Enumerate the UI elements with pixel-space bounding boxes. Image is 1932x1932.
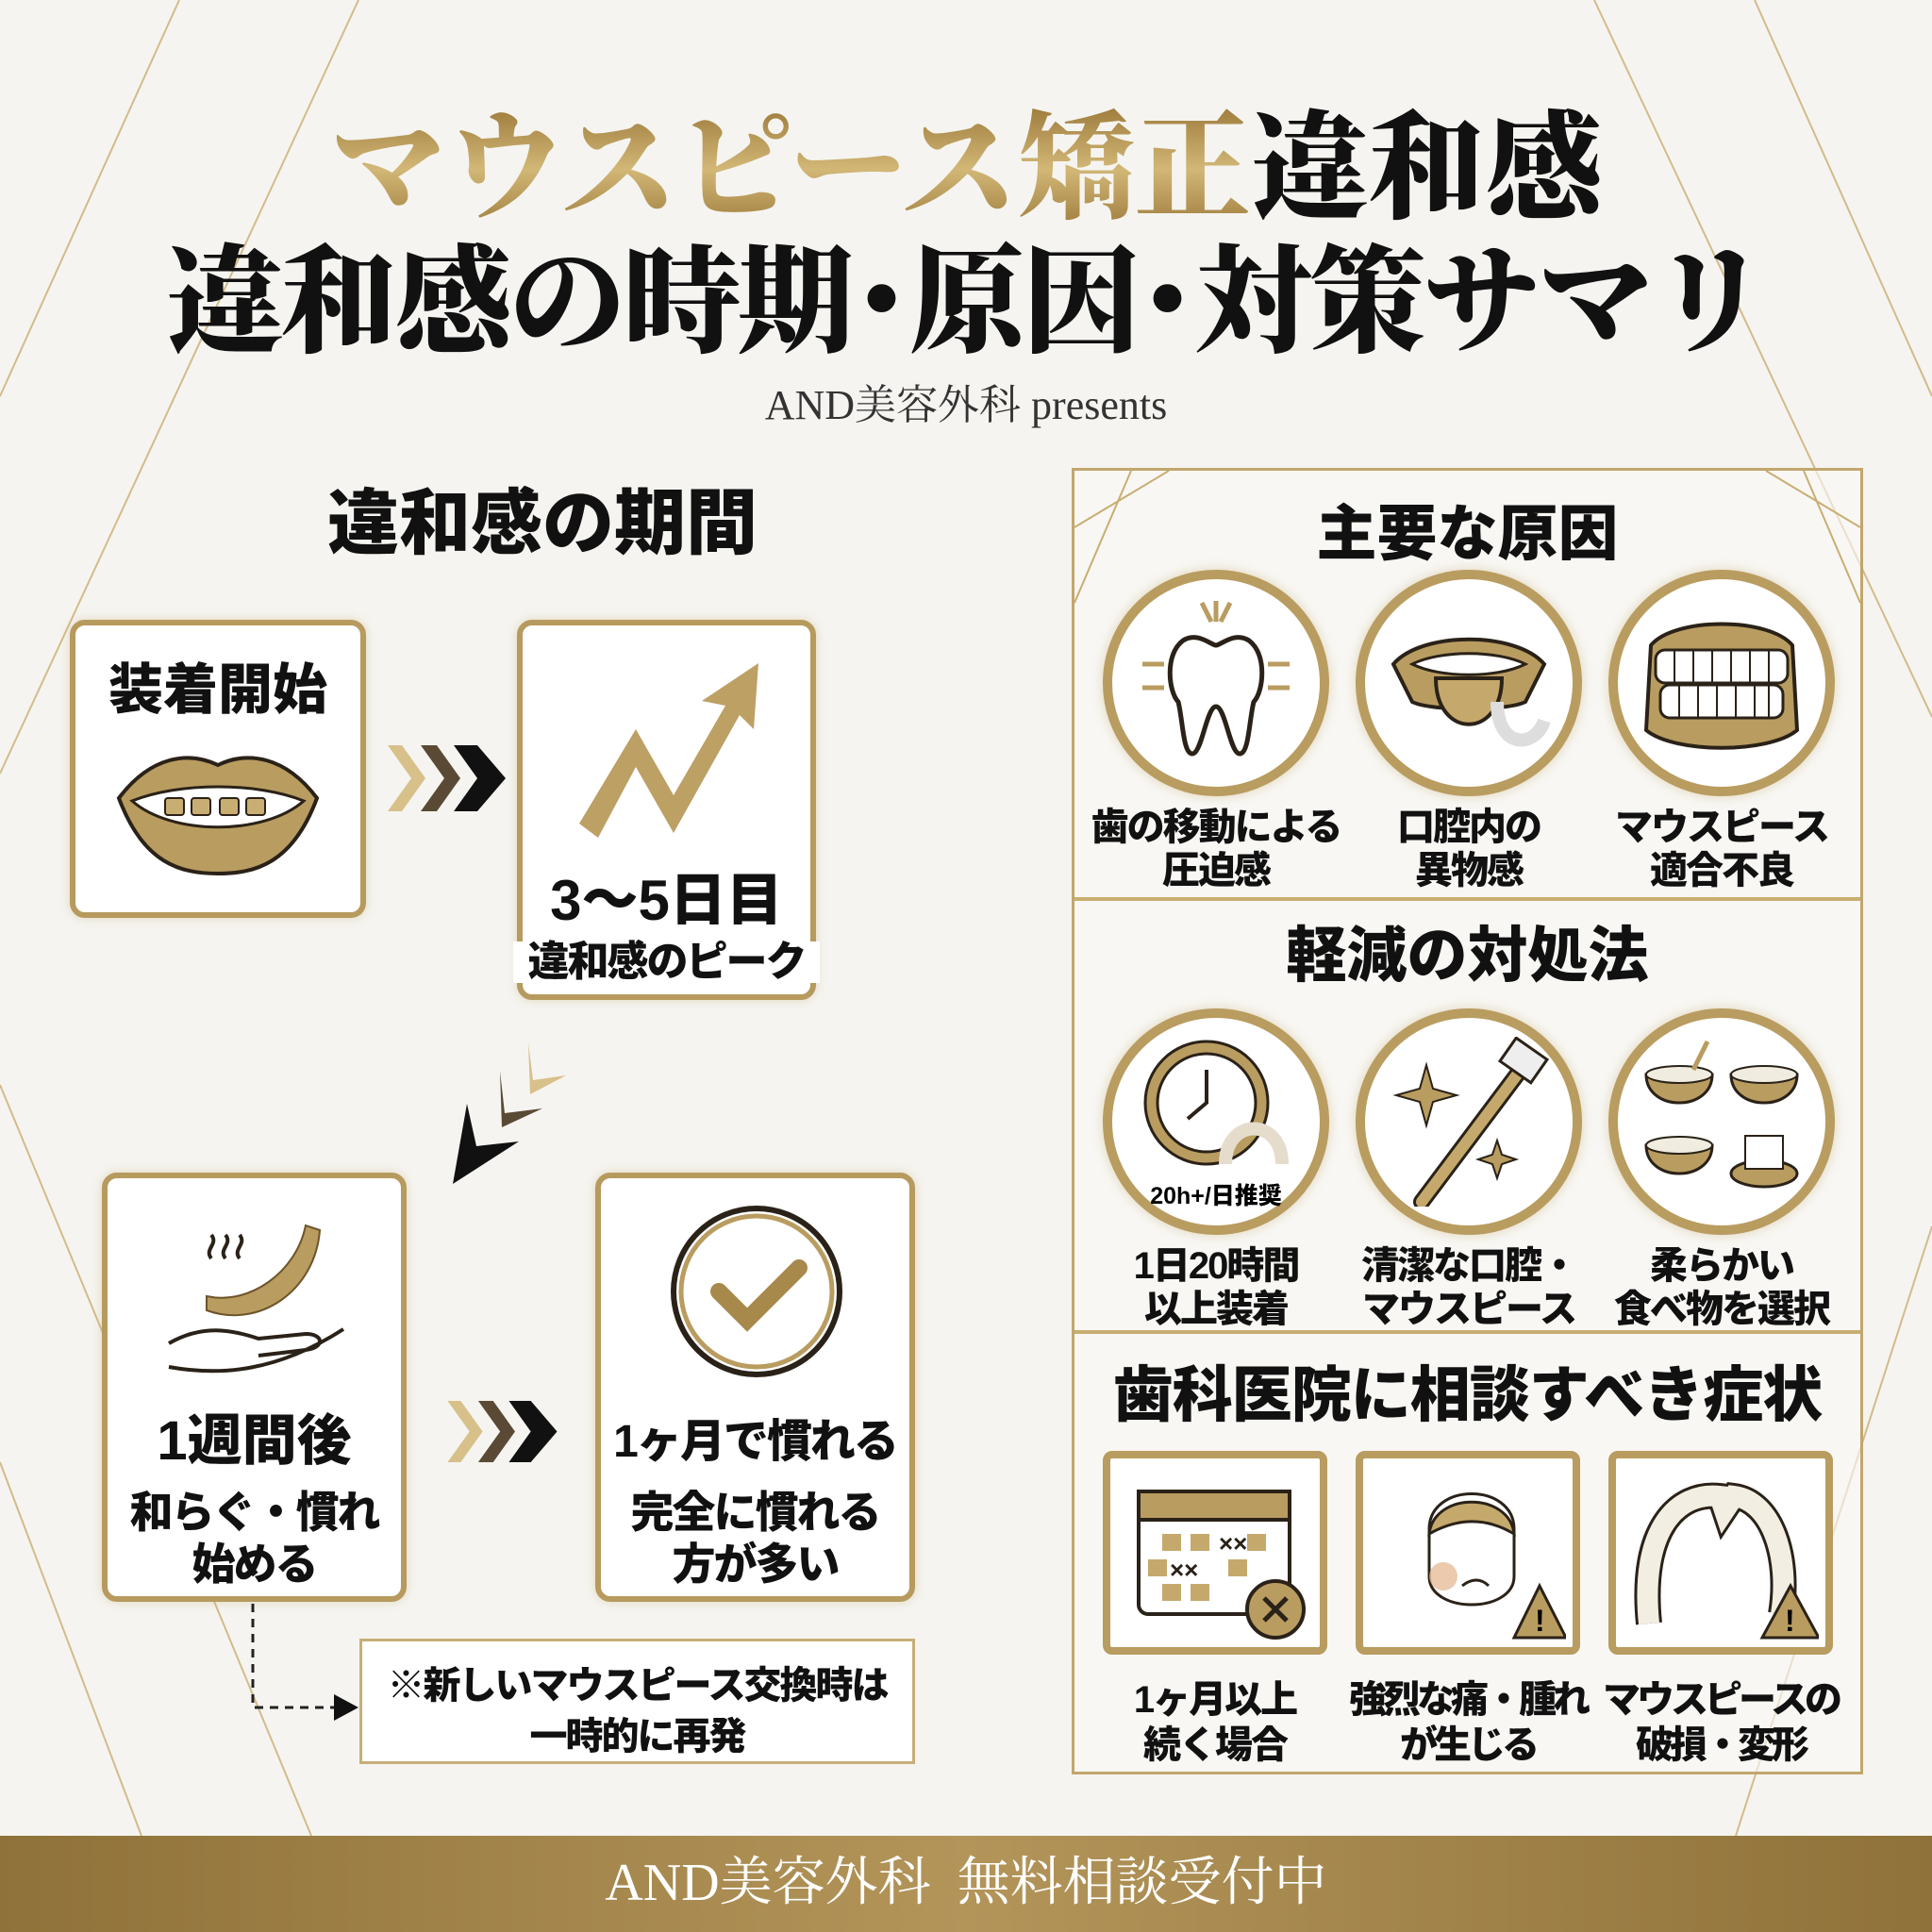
cause 1 tooth: 歯の移動による [1091, 807, 1341, 848]
symptom 3 broken aligner: ! [1785, 1604, 1795, 1638]
arrow: right chevrons 2 [447, 1401, 557, 1462]
label subside [130, 1488, 379, 1589]
symptom 1 calendar: 1ヶ月以上 [1134, 1679, 1296, 1721]
heading consult: 歯科医院に相談すべき症状 [1113, 1361, 1822, 1429]
cause 1 tooth [1091, 564, 1341, 891]
remedy 2 toothbrush: マウスピース [1362, 1289, 1575, 1330]
heading remedies: 軽減の対処法 [1287, 922, 1649, 990]
note box: 一時的に再発 [530, 1716, 745, 1757]
label peak: 違和感のピーク [528, 939, 806, 985]
title line 1: マウスピース矯正違和感 [329, 105, 1603, 234]
symptom 2 face pain: ! [1535, 1604, 1545, 1638]
remedy 2 toothbrush: 清潔な口腔・ [1361, 1245, 1576, 1287]
panel: right [1072, 468, 1863, 1774]
footer banner [0, 1836, 1932, 1932]
left heading: 違和感の期間 [327, 484, 758, 564]
symptom 3 broken aligner: 破損・変形 [1636, 1724, 1806, 1766]
arrow: right chevrons 1 [388, 745, 506, 811]
cause 2 tongue: 異物感 [1415, 850, 1523, 891]
cause 2 tongue [1349, 564, 1589, 891]
remedy 1 clock: 20h+/日推奨 [1150, 1183, 1282, 1209]
symptom 3 broken aligner [1603, 1451, 1840, 1766]
icon: check circle [671, 1206, 842, 1377]
icon: rising arrow [579, 663, 758, 838]
label peak days: 3〜5日目 [550, 869, 783, 932]
box: 1 week [102, 1173, 407, 1602]
label most adapt: 完全に慣れる [630, 1488, 879, 1537]
remedy 1 clock: 以上装着 [1144, 1289, 1288, 1330]
cause 3 teeth: 適合不良 [1650, 850, 1793, 891]
box: peak [517, 620, 816, 1000]
label 1 week: 1週間後 [157, 1410, 352, 1472]
footer banner: AND美容外科 無料相談受付中 [605, 1854, 1327, 1912]
arrow: down-left chevrons [453, 1043, 566, 1184]
arrow: dashed note connector [251, 1604, 358, 1721]
label 1 month: 1ヶ月で慣れる [613, 1417, 897, 1467]
cause 2 tongue: 口腔内の [1397, 807, 1541, 848]
cause 1 tooth: 圧迫感 [1162, 850, 1270, 891]
cause 3 teeth [1602, 564, 1841, 891]
title line 2: ・ [1109, 239, 1224, 368]
note box: ※新しいマウスピース交換時は [387, 1665, 887, 1707]
cause 3 teeth: マウスピース [1615, 807, 1828, 848]
title line 2: 違和感の時期 原因 対策サマリ [166, 239, 1766, 368]
remedy 3 soft food: 柔らかい [1650, 1245, 1793, 1287]
box: start [70, 620, 366, 918]
note box [359, 1639, 915, 1764]
label subside: 始める [192, 1540, 317, 1589]
icon: hand with aligner [168, 1224, 344, 1374]
symptom 1 calendar: 続く場合 [1143, 1724, 1287, 1766]
label start: 装着開始 [108, 659, 327, 721]
icon: lips with braces [117, 756, 319, 875]
label subside: 和らぐ・慣れ [130, 1488, 379, 1537]
symptom 2 face pain: が生じる [1400, 1724, 1536, 1766]
remedy 3 soft food [1602, 1002, 1841, 1330]
symptom 2 face pain [1349, 1451, 1590, 1766]
label most adapt: 方が多い [672, 1540, 838, 1589]
symptom 3 broken aligner: マウスピースの [1603, 1679, 1839, 1721]
title line 2: ・ [823, 239, 937, 368]
box: 1 month [595, 1173, 915, 1602]
label most adapt [630, 1488, 879, 1589]
remedy 1 clock [1096, 1002, 1336, 1330]
symptom 1 calendar: ×× [1170, 1556, 1198, 1584]
symptom 1 calendar [1103, 1451, 1327, 1766]
symptom 1 calendar: ×× [1219, 1529, 1247, 1557]
subtitle presents: AND美容外科 presents [765, 382, 1167, 428]
symptom 2 face pain: 強烈な痛・腫れ [1349, 1679, 1587, 1721]
heading causes: 主要な原因 [1317, 500, 1619, 568]
remedy 3 soft food: 食べ物を選択 [1614, 1289, 1829, 1330]
remedy 1 clock: 1日20時間 [1134, 1245, 1298, 1287]
remedy 2 toothbrush [1349, 1002, 1589, 1330]
